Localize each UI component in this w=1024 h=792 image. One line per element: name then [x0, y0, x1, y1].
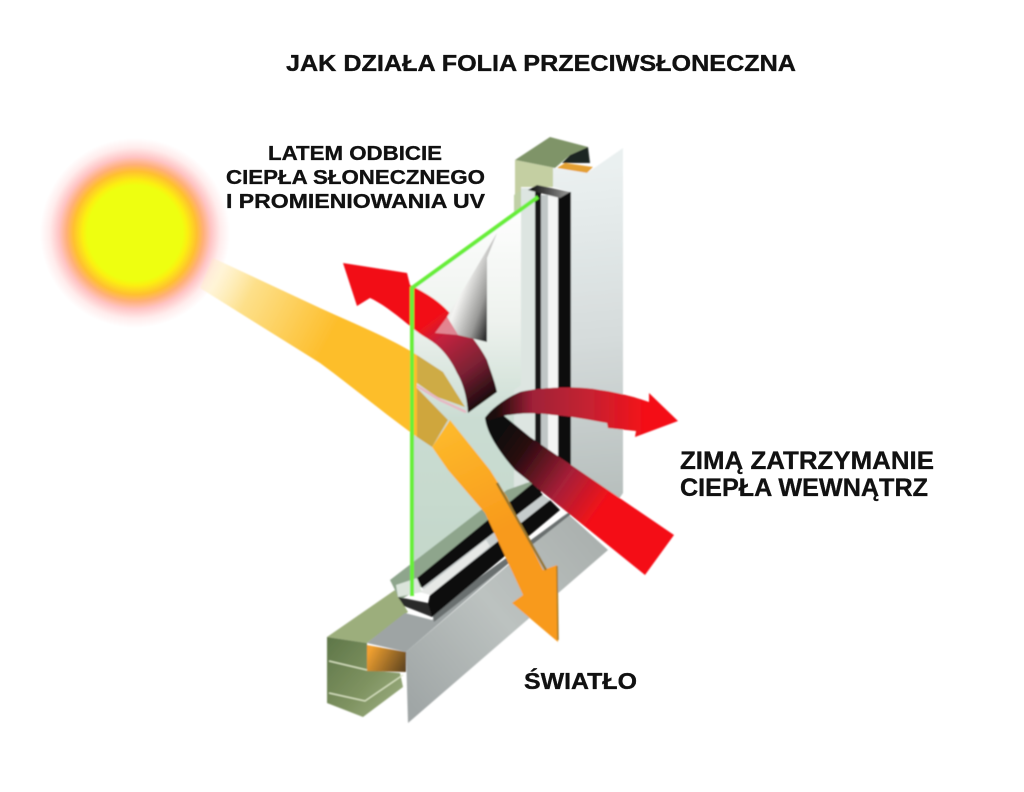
film edge: green line	[412, 197, 538, 596]
label: light: ŚWIATŁO	[524, 667, 637, 694]
window sill: top face	[367, 512, 568, 652]
window frame: left brick jamb	[514, 190, 521, 392]
arrow: sunlight beam	[200, 258, 558, 642]
window frame: vertical rails	[535, 192, 571, 505]
icon: sun	[40, 138, 230, 328]
arrow: reflected heat	[343, 263, 497, 413]
illustration: window cross-section	[200, 137, 678, 723]
label: winter retention: ZIMĄ ZATRZYMANIE	[680, 447, 934, 475]
label: winter retention: CIEPŁA WEWNĄTRZ	[680, 474, 928, 502]
label: winter retention	[680, 447, 934, 502]
label: summer reflection: CIEPŁA SŁONECZNEGO	[226, 167, 485, 189]
window sill: rails	[396, 483, 572, 622]
window frame: right side panel	[553, 148, 623, 515]
label: summer reflection: LATEM ODBICIE	[268, 143, 442, 165]
label: summer reflection	[226, 143, 486, 213]
arrow: retained heat, outgoing	[485, 387, 678, 437]
window frame: glass pane	[412, 200, 535, 595]
window frame: top glazing cap	[528, 185, 570, 198]
icon: peeling film	[435, 233, 497, 342]
arrow: retained heat, lower band	[485, 413, 674, 575]
title: JAK DZIAŁA FOLIA PRZECIWSŁONECZNA	[286, 50, 796, 76]
label: summer reflection: I PROMIENIOWANIA UV	[226, 191, 486, 213]
window frame: top brick lintel	[515, 137, 593, 200]
window sill: opening	[367, 645, 406, 672]
window sill: front face	[406, 514, 608, 723]
window sill: brick end and top	[327, 480, 540, 717]
